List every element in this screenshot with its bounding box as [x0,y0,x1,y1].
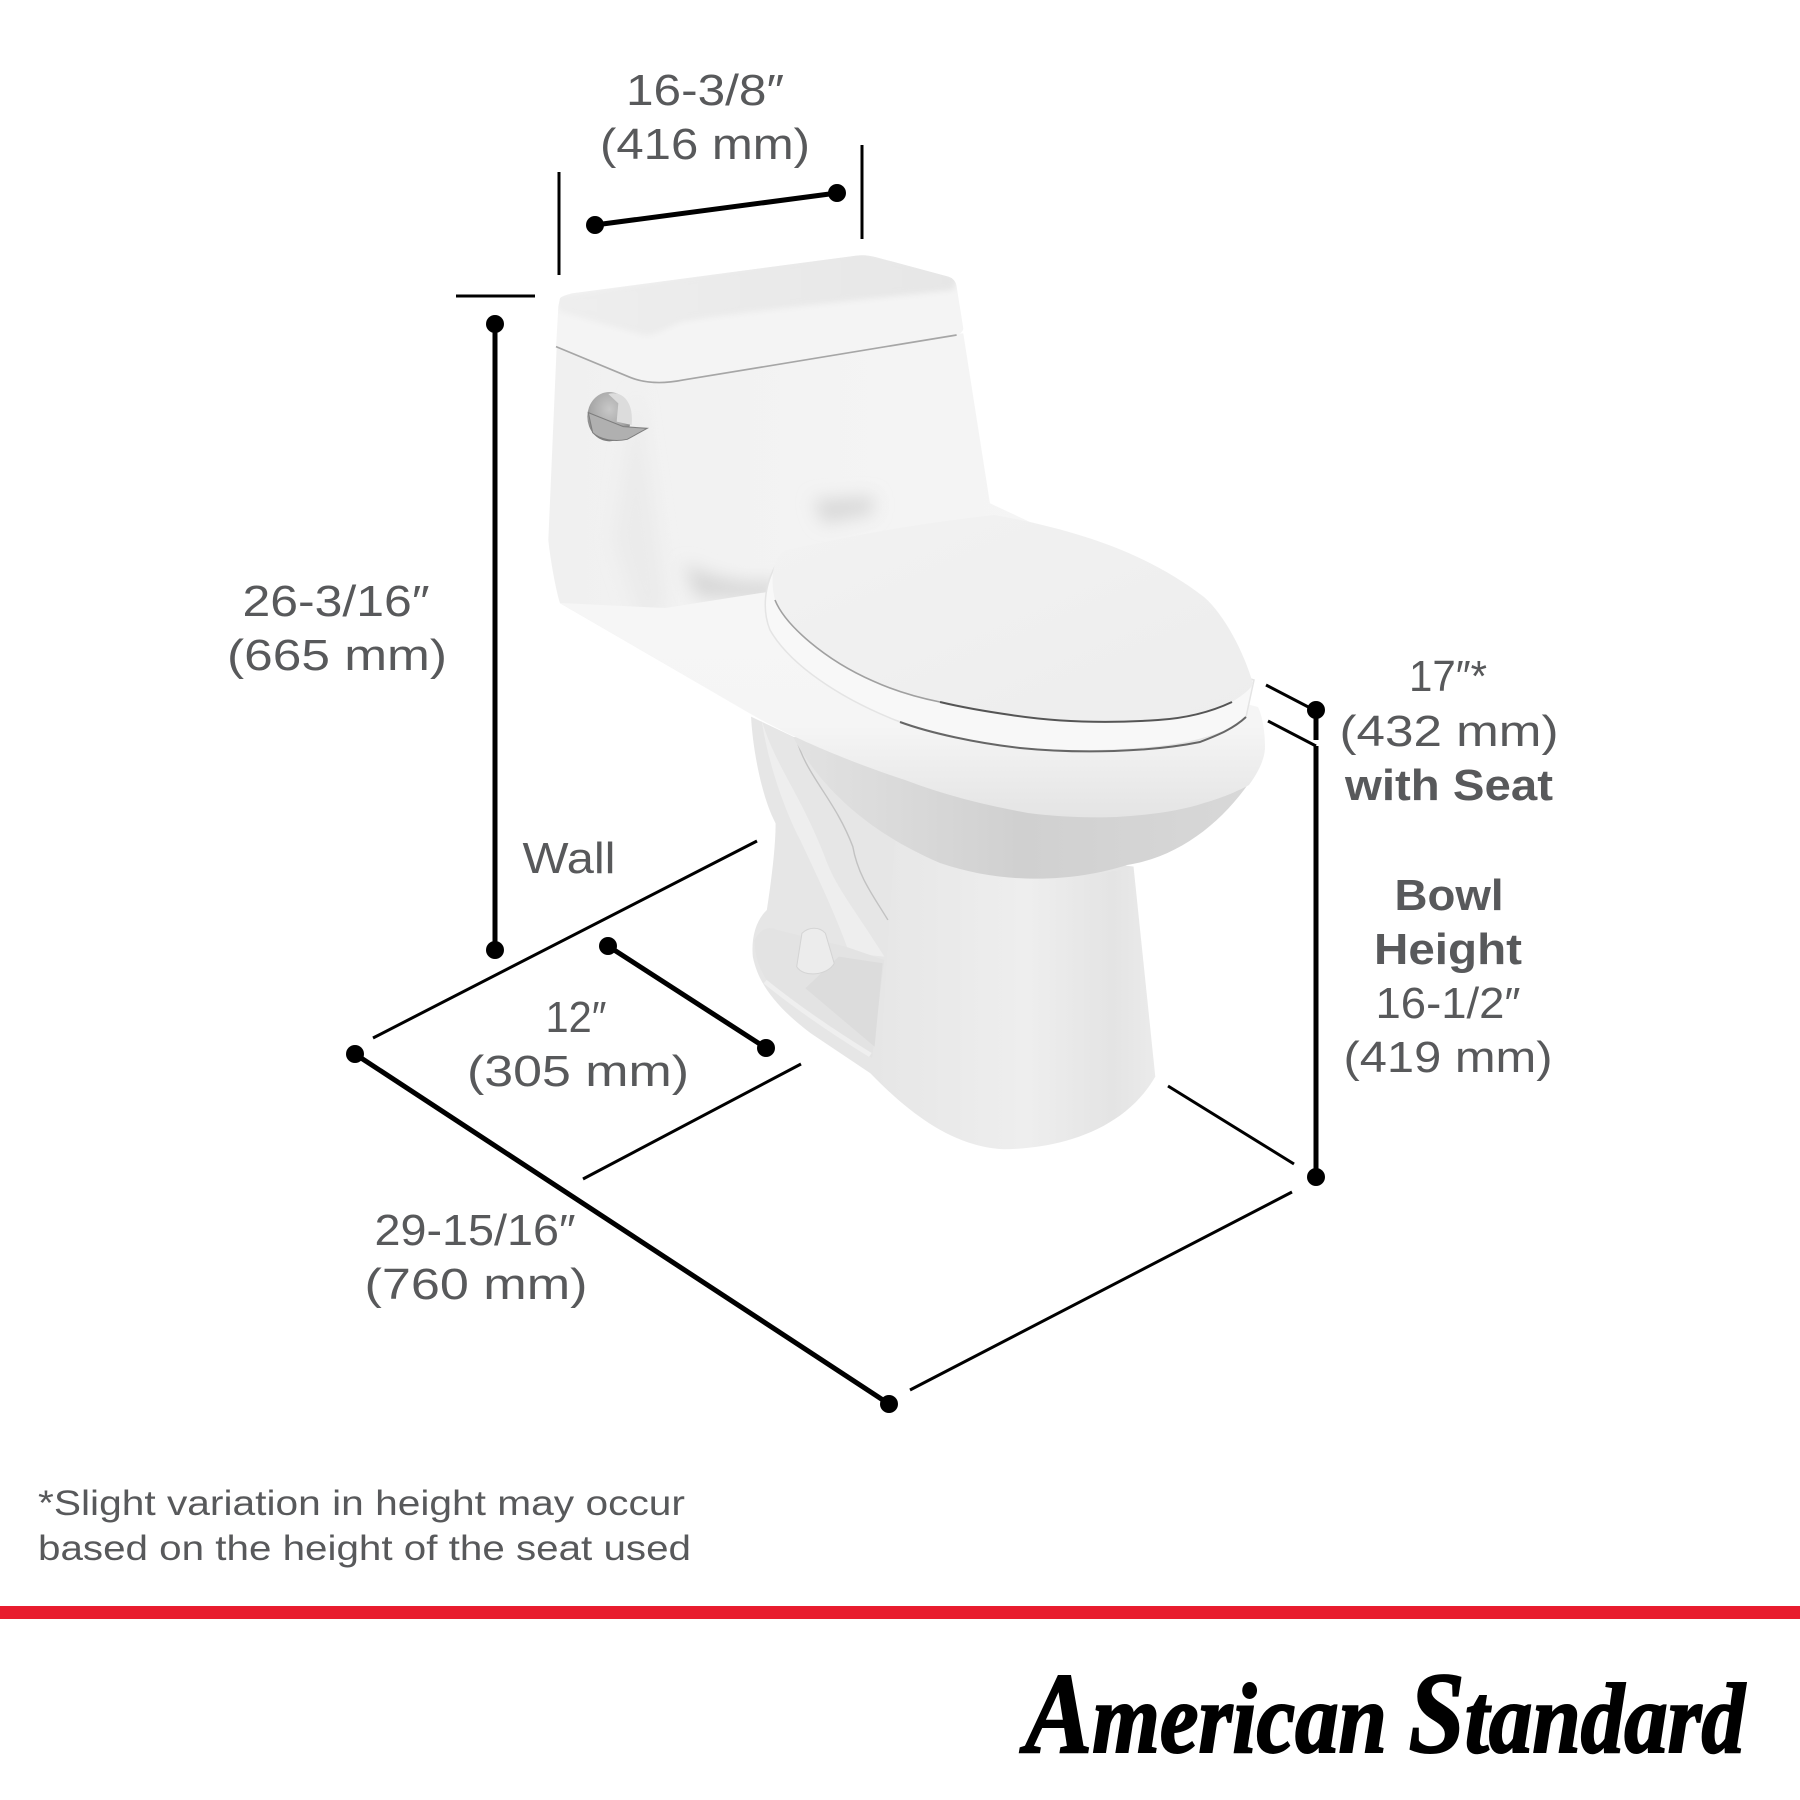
tank soft shadows [683,563,780,600]
lower body: trapway, base, pedestal [751,717,1155,1149]
bolt cap [797,928,834,974]
pedestal [870,840,1155,1149]
seat ring shadow line [900,717,1246,751]
dimension: overall height: (665 mm) [227,631,447,680]
dimension: tank width [559,66,862,275]
dimension: tank width: 16-3/8″ [626,66,784,115]
tank body [548,333,1040,740]
seat lid edge line, left [775,600,940,702]
trapway folds [762,720,884,957]
dimension: bowl height: with Seat [1344,761,1553,810]
dimension: rough-in [373,841,801,1179]
dimension: rough-in: (305 mm) [467,1047,689,1096]
dimension: tank width: (416 mm) [600,120,810,169]
dimension: overall depth [346,1045,1294,1413]
tank lid [553,250,963,382]
trapway [751,717,1134,1073]
footnote: based on the height of the seat used [38,1529,691,1568]
logo: American Standard: American Standard [1020,1650,1747,1778]
seat ring [765,563,1254,751]
upper body: tank [548,255,1028,610]
footnote: *Slight variation in height may occur [38,1484,685,1523]
dimension: bowl height: Bowl [1394,871,1504,920]
dimension: bowl height: 17″* [1409,652,1487,701]
dimension: overall depth: 29-15/16″ [374,1206,576,1255]
label: wall: Wall [522,834,616,883]
bowl underside [793,737,1249,879]
dimension: bowl height: (432 mm) [1340,707,1558,756]
dimension: bowl height: Height [1374,925,1522,974]
dimension: overall depth: (760 mm) [364,1260,588,1309]
dimension: overall height [227,296,535,959]
seat lid edge line, right [940,702,1232,722]
dimension: bowl height: (419 mm) [1344,1033,1552,1082]
seat lid [772,515,1253,722]
bowl rim and deck [560,590,1265,817]
flush lever [587,392,647,441]
toilet illustration [548,250,1265,1149]
footnote [38,1484,691,1568]
dimension: rough-in: 12″ [546,993,606,1042]
dimension: bowl height [1266,652,1558,1186]
dimension: bowl height: 16-1/2″ [1376,979,1520,1028]
red divider bar [0,1606,1800,1619]
base foot [755,928,884,1058]
dimension: overall height: 26-3/16″ [242,577,430,626]
